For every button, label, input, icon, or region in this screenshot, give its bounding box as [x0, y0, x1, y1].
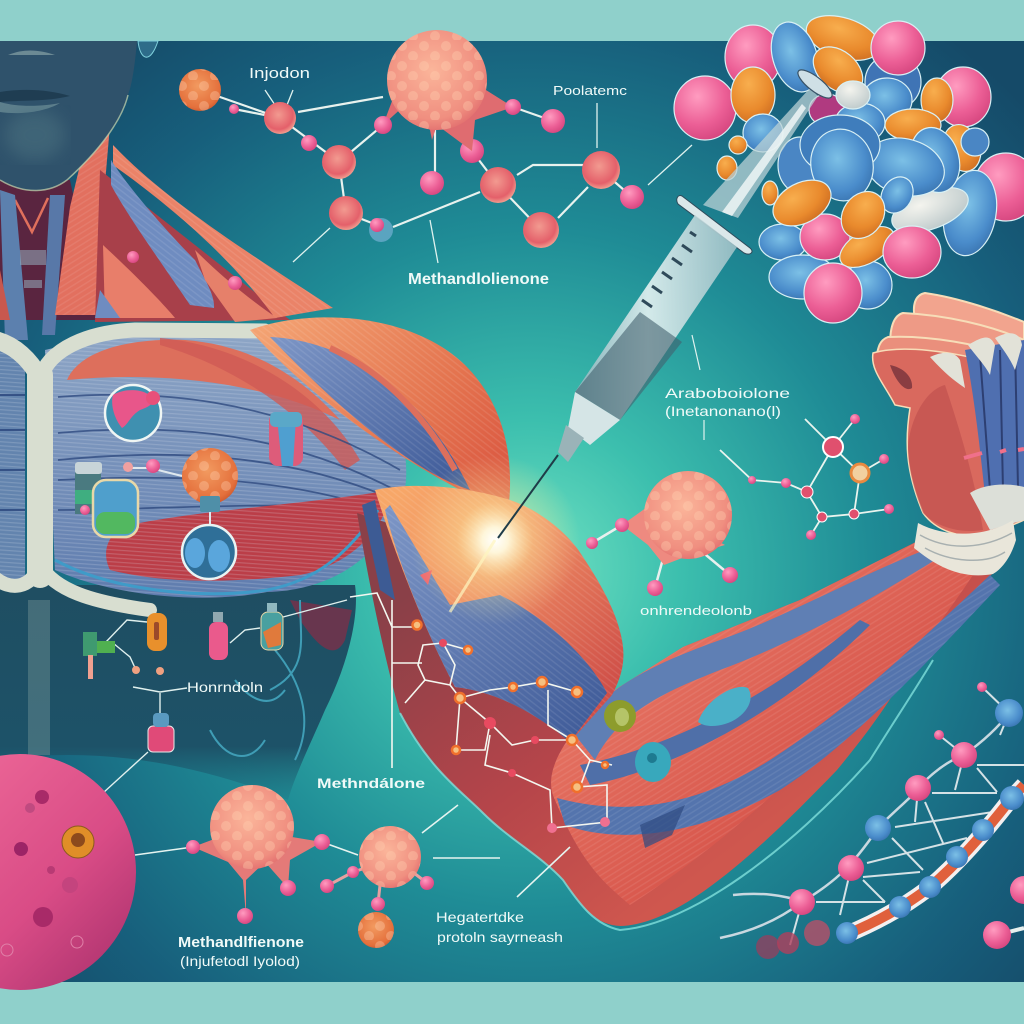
pink cell	[0, 754, 136, 990]
figure: neck	[0, 180, 100, 340]
figure: chest muscles	[0, 327, 406, 598]
label: methandienone top: Methandlolienone	[408, 271, 549, 288]
label: hormone: Honrndoln	[187, 679, 263, 695]
figure: lower arm body	[357, 513, 1000, 930]
annotation: anabolic steroid label: (Inetanonano(l)	[665, 403, 781, 419]
figure: face	[0, 41, 158, 191]
chest icon: glass vial receptor	[75, 462, 138, 537]
top band	[0, 0, 1024, 41]
annotation: anabolic steroid label: Araboboiolone	[665, 385, 790, 401]
structural formula on arm	[350, 593, 612, 833]
label: hepatocyte protein synthesis	[436, 909, 563, 945]
receptor icons on forearm	[604, 687, 751, 782]
molecule network	[179, 69, 692, 263]
figure: upper arm	[250, 317, 510, 512]
DNA helix bottom right	[720, 682, 1024, 959]
label: hepatocyte protein synthesis: protoln sayrneash	[437, 929, 563, 945]
label: methandienone bottom	[178, 934, 304, 969]
annotation: anabolic steroid label	[665, 335, 790, 440]
lower chest vials	[83, 600, 347, 793]
figure: clenched fist	[873, 293, 1024, 575]
chest icon: receptor with pink ligand	[105, 385, 161, 441]
protein blob middle	[586, 471, 738, 596]
figure: lower torso	[0, 585, 356, 800]
label: poolatemc: Poolatemc	[553, 83, 628, 98]
molecule cluster top right	[674, 7, 1024, 323]
syringe	[498, 66, 836, 538]
figure: shoulder muscles	[55, 125, 333, 322]
label: methandienone bottom: Methandlfienone	[178, 934, 304, 951]
label: injection: Injodon	[249, 65, 310, 82]
label: hepatocyte protein synthesis: Hegatertdke	[436, 909, 524, 925]
chest icon: capsule	[269, 412, 303, 466]
label: onhrendeolonb: onhrendeolonb	[640, 603, 752, 618]
small molecule right	[720, 414, 894, 540]
figure: white T-shaped band	[0, 330, 265, 610]
protein blobs bottom	[186, 785, 434, 948]
label: methandienone middle: Methndálone	[317, 775, 425, 791]
connector lines	[135, 805, 570, 897]
chest icon: protein and receptor	[123, 448, 238, 579]
label: methandienone bottom: (Injufetodl Iyolod)	[180, 953, 300, 969]
protein blob top	[374, 30, 521, 151]
injection glow	[410, 455, 580, 625]
figure: biceps	[362, 486, 623, 742]
bottom band	[0, 982, 1024, 1024]
